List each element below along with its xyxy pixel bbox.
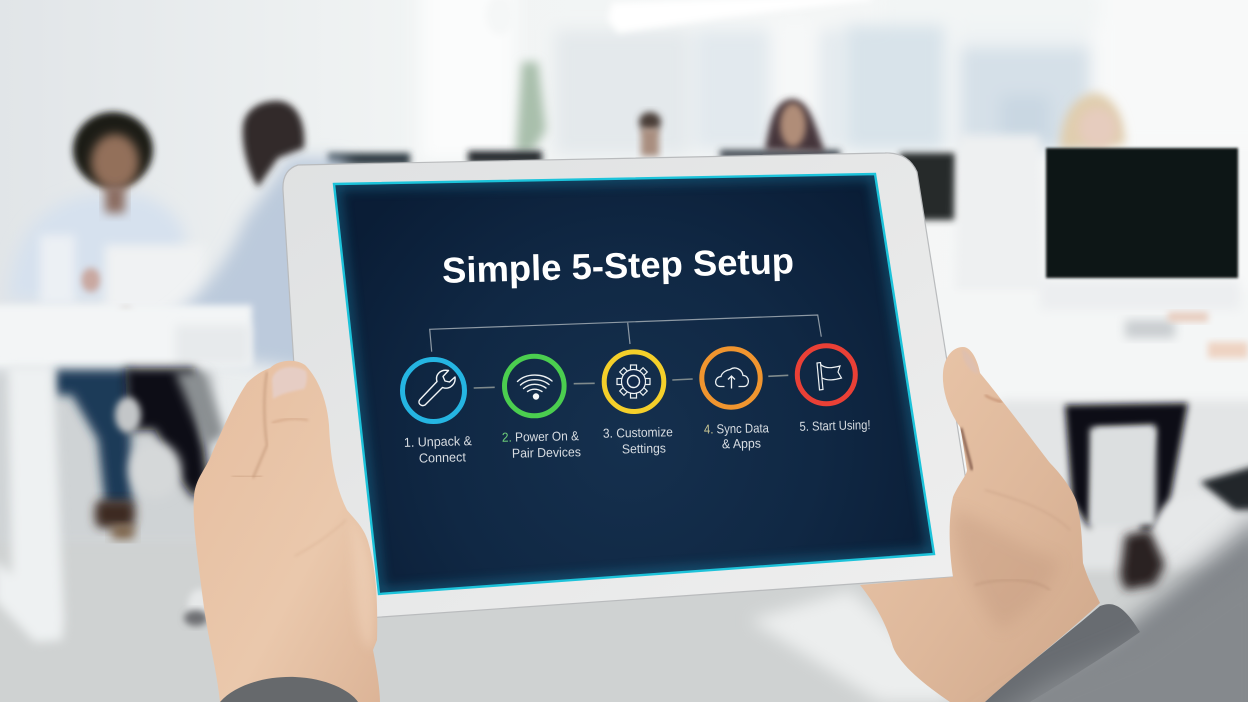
- background: seated legs under right desk: [1000, 400, 1248, 590]
- background: office windows and ceiling light: [420, 0, 1248, 160]
- background: white desk leg on floor: [750, 590, 950, 702]
- label 4: & Apps: [722, 436, 762, 451]
- background: person 1: [8, 112, 185, 300]
- left sleeve: [220, 677, 358, 702]
- background: plant: [516, 62, 546, 152]
- background: left desk leg: [0, 365, 64, 642]
- tablet screen: [334, 174, 934, 594]
- step 1: unpack and connect: [402, 360, 472, 466]
- background: dark monitors behind tablet: [328, 150, 956, 220]
- background: right desk: [930, 280, 1248, 402]
- tablet body: [283, 153, 981, 622]
- label 2: [502, 428, 582, 461]
- background: person 2: [119, 101, 345, 375]
- foreground: blurred shoulder overlap: [975, 550, 1248, 702]
- step 5: start using: [797, 346, 871, 434]
- background: left desk: [0, 305, 252, 367]
- step 2: power on and pair: [502, 356, 582, 461]
- label 1: [404, 433, 472, 466]
- label 3: Settings: [622, 441, 667, 456]
- label 1: Connect: [419, 449, 466, 466]
- step 3: customize settings: [603, 352, 673, 456]
- tablet: [283, 153, 981, 622]
- icon: gear ring: [604, 352, 664, 412]
- background: white computer back: [955, 135, 1045, 370]
- step 4: sync data and apps: [702, 349, 770, 451]
- label 4: [704, 420, 770, 451]
- label 1: 1. Unpack &: [404, 433, 472, 450]
- background: people behind tablet: [639, 93, 1125, 156]
- icon: wrench ring: [402, 360, 464, 422]
- background: seated legs under left desk: [0, 368, 225, 626]
- foreground: blurred shoulder: [960, 510, 1248, 702]
- label 4: 4. Sync Data: [704, 420, 770, 437]
- icon: flag ring: [797, 346, 855, 404]
- label 3: 3. Customize: [603, 424, 673, 441]
- left hand: [194, 361, 380, 702]
- label 5: 5. Start Using!: [799, 417, 871, 434]
- icon: wifi ring: [504, 356, 564, 416]
- background: laptop on desk: [105, 245, 205, 310]
- background: floor: [0, 530, 1248, 702]
- background: black monitor: [1046, 148, 1238, 278]
- right sleeve: [985, 604, 1140, 702]
- connector bracket: [430, 315, 821, 352]
- label 2: 2. Power On &: [502, 428, 579, 445]
- dashes between steps: [474, 375, 788, 388]
- thumb nail: [964, 352, 978, 372]
- label 2: Pair Devices: [512, 444, 582, 461]
- label 3: [603, 424, 673, 456]
- thumb nail: [272, 367, 307, 399]
- icon: cloud ring: [702, 349, 760, 407]
- title: Simple 5-Step Setup: [442, 240, 795, 291]
- right hand: [860, 347, 1100, 702]
